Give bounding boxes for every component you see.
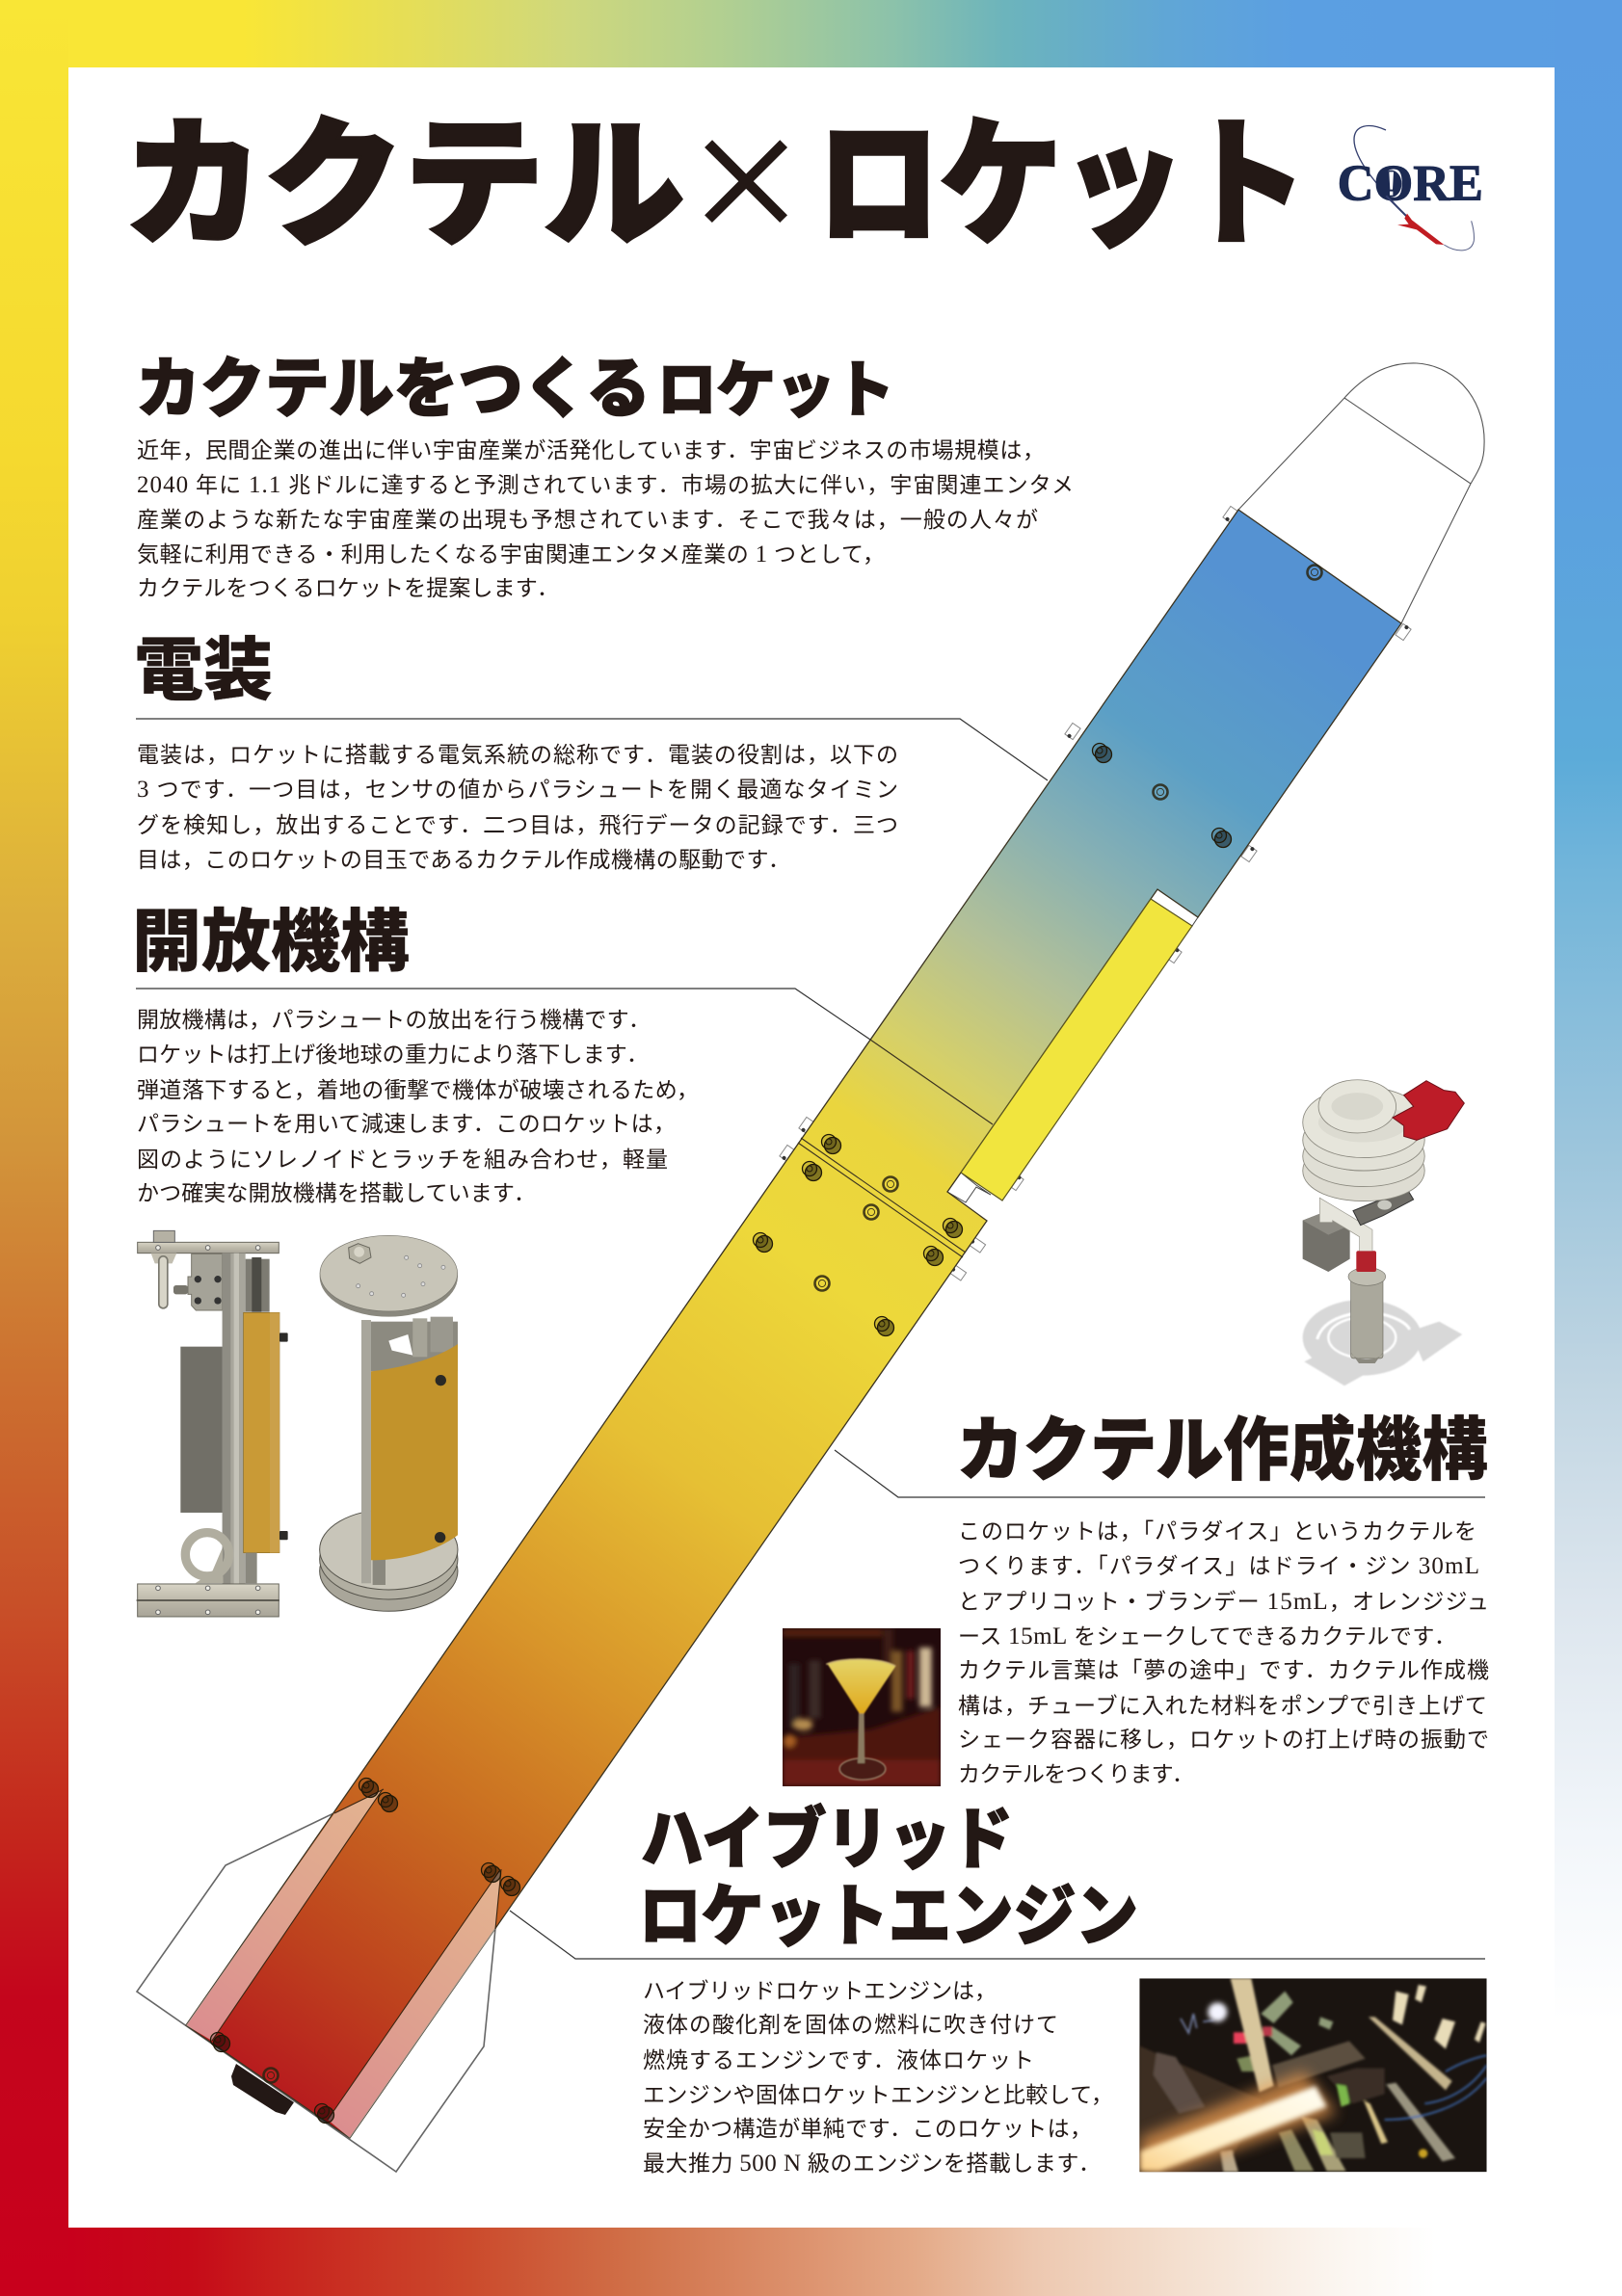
image: release mechanism: [137, 1230, 458, 1617]
heading: カクテル作成機構: 作成機構: [1223, 1393, 1488, 1494]
gradient border: left: [0, 0, 68, 2296]
heading: カクテル作成機構: カクテル: [957, 1393, 1223, 1494]
text block: intro: [137, 438, 1074, 600]
logo: CORE: CORE: [1338, 156, 1483, 212]
rocket: nose cone: [1238, 363, 1484, 623]
rocket: body section line: [870, 1040, 993, 1124]
rocket: nozzle: [231, 2064, 294, 2115]
text block: intro: 気軽に利用できる・利用したくなる宇宙関連エンタメ産業の 1 つとして，: [137, 541, 885, 567]
rocket: nose base line: [1344, 398, 1471, 484]
text block: 電装: 目は，このロケットの目玉であるカクテル作成機構の駆動です．: [137, 848, 790, 872]
image: cocktail photo: [783, 1628, 941, 1786]
rocket: fins: [137, 1789, 501, 2172]
leader line: 開放機構: [136, 989, 870, 1040]
rocket: bolts: [210, 565, 1322, 2124]
title: [123, 71, 1307, 274]
heading: カクテルをつくるロケット: [136, 335, 894, 431]
rocket: oxidizer tank: [961, 899, 1192, 1201]
text block: カクテル作成機構: [958, 1519, 1489, 1786]
text block: 開放機構: かつ確実な開放機構を搭載しています．: [137, 1181, 536, 1205]
rocket: translucent fin root right: [328, 1869, 501, 2138]
text block: 電装: [137, 743, 898, 872]
text block: カクテル作成機構: 構は，チューブに入れた材料をポンプで引き上げて: [958, 1694, 1487, 1718]
text block: intro: カクテルをつくるロケットを提案します．: [137, 576, 559, 600]
text block: 電装: 電装は，ロケットに搭載する電気系統の総称です．電装の役割は，以下の: [137, 743, 898, 767]
title: ×: [682, 83, 810, 267]
rocket: joint lines: [798, 1138, 966, 1257]
heading: カクテル作成機構: [957, 1393, 1488, 1494]
text block: intro: 近年，民間企業の進出に伴い宇宙産業が活発化しています．宇宙ビジネスの市場規模は，: [137, 438, 1045, 462]
leader line: ハイブリッド: [510, 1911, 1485, 1959]
leader line: カクテル作成機構: [835, 1450, 1485, 1497]
text block: 電装: 3 つです．一つ目は，センサの値からパラシュートを開く最適なタイミン: [137, 777, 898, 803]
text block: ハイブリッド: エンジンや固体ロケットエンジンと比較して，: [643, 2083, 1113, 2107]
gradient border: top: [0, 0, 1622, 67]
text block: ハイブリッド: ハイブリッドロケットエンジンは，: [643, 1979, 997, 2003]
text block: カクテル作成機構: シェーク容器に移し，ロケットの打上げ時の振動で: [958, 1728, 1489, 1752]
text block: ハイブリッド: 燃焼するエンジンです．液体ロケット: [643, 2048, 1034, 2072]
gradient border: right: [1555, 0, 1622, 2296]
text block: ハイブリッド: 最大推力 500 N 級のエンジンを搭載します．: [643, 2151, 1101, 2177]
perspective view mechanism: [320, 1235, 458, 1611]
text block: ハイブリッド: [643, 1979, 1113, 2177]
leader line: 電装: [136, 719, 1048, 780]
image: engine firing photo: [1139, 1978, 1487, 2172]
text block: カクテル作成機構: つくります．「パラダイス」はドライ・ジン 30mL: [958, 1553, 1479, 1579]
title: カクテル: [123, 71, 684, 274]
text block: 開放機構: 図のようにソレノイドとラッチを組み合わせ，軽量: [137, 1148, 668, 1172]
text block: 開放機構: 開放機構は，パラシュートの放出を行う機構です．: [137, 1008, 651, 1032]
logo: CORE: [1338, 126, 1483, 251]
heading: 電装: 電装: [134, 616, 273, 714]
text block: ハイブリッド: 安全かつ構造が単純です．このロケットは，: [643, 2117, 1092, 2141]
gradient border: bottom: [68, 2228, 1555, 2296]
rocket: translucent fin root left: [186, 1789, 383, 2041]
rocket: body: [186, 510, 1401, 2138]
heading: カクテルをつくるロケット: ロケット: [657, 341, 894, 430]
text block: 開放機構: 弾道落下すると，着地の衝撃で機体が破壊されるため，: [137, 1078, 699, 1102]
text block: カクテル作成機構: とアプリコット・ブランデー 15mL，オレンジジュ: [958, 1589, 1489, 1615]
text block: 電装: グを検知し，放出することです．二つ目は，飛行データの記録です．三つ: [137, 813, 898, 837]
rocket: tabs: [779, 506, 1412, 1280]
heading: ハイブリッド: ハイブリッド: [641, 1785, 1013, 1883]
text block: 開放機構: ロケットは打上げ後地球の重力により落下します．: [137, 1042, 649, 1067]
text block: 開放機構: [137, 1008, 699, 1205]
text block: intro: 産業のような新たな宇宙産業の出現も予想されています．そこで我々は，一般の人々が: [137, 508, 1038, 532]
text block: カクテル作成機構: このロケットは，「パラダイス」というカクテルを: [958, 1519, 1476, 1544]
text block: カクテル作成機構: ース 15mL をシェークしてできるカクテルです．: [958, 1623, 1456, 1649]
rocket: tube details: [947, 889, 1198, 1202]
heading: ロケットエンジン: ロケットエンジン: [639, 1862, 1138, 1960]
side view mechanism: [137, 1230, 288, 1617]
title: ロケット: [817, 71, 1307, 274]
text block: intro: 2040 年に 1.1 兆ドルに達すると予測されています．市場の拡大に伴い，宇宙関連エンタメ: [137, 472, 1074, 498]
rocket: fin lines on body: [212, 1789, 501, 2120]
rocket: [137, 363, 1484, 2172]
text block: ハイブリッド: 液体の酸化剤を固体の燃料に吹き付けて: [643, 2013, 1058, 2037]
text block: カクテル作成機構: カクテルをつくります．: [958, 1762, 1194, 1786]
text block: 開放機構: パラシュートを用いて減速します．このロケットは，: [137, 1112, 676, 1136]
image: cocktail mechanism: [1303, 1081, 1464, 1386]
cocktail mechanism: shadow: [1303, 1300, 1462, 1386]
text block: カクテル作成機構: カクテル言葉は「夢の途中」です．カクテル作成機: [958, 1658, 1489, 1682]
heading: カクテルをつくるロケット: カクテルをつくる: [136, 335, 651, 431]
heading: 開放機構: 開放機構: [132, 887, 410, 986]
